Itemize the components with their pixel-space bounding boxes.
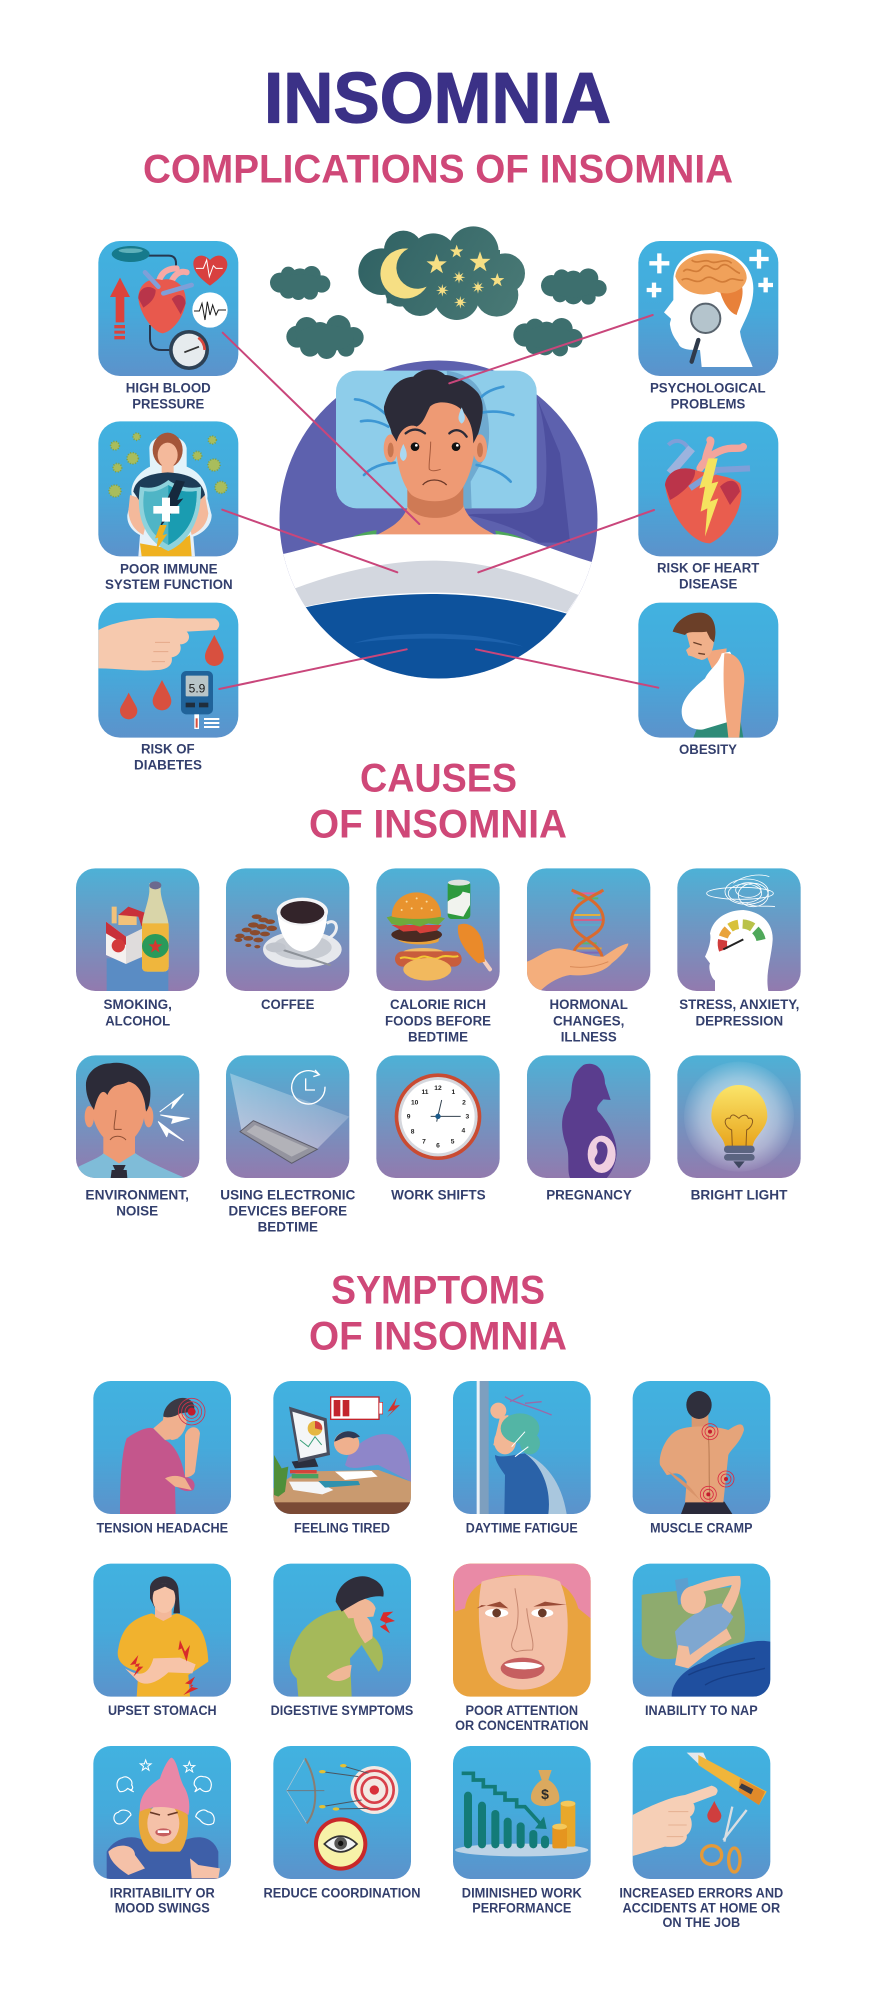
label: STRESS, ANXIETY,	[679, 997, 799, 1012]
label: USING ELECTRONIC	[220, 1188, 356, 1202]
label: DIMINISHED WORK	[462, 1886, 582, 1900]
label: PERFORMANCE	[472, 1900, 571, 1915]
icon: finger, blood drops and glucose meter	[98, 603, 238, 738]
icon: wall clock: 6	[436, 1143, 440, 1150]
label: OR CONCENTRATION	[455, 1718, 588, 1733]
heading: symptoms: SYMPTOMS	[331, 1269, 545, 1313]
label: UPSET STOMACH	[108, 1703, 217, 1718]
label: DEPRESSION	[695, 1013, 783, 1028]
icon: pregnant silhouette with fetus	[527, 1055, 650, 1178]
heading: causes: OF INSOMNIA	[309, 802, 567, 846]
icon: wall clock: 5	[451, 1139, 455, 1146]
panel: risk of diabetes	[98, 603, 238, 772]
panel: stress, anxiety, depression	[677, 868, 801, 1028]
panel: poor immune system function	[98, 421, 238, 592]
heading: symptoms: OF INSOMNIA	[309, 1314, 567, 1358]
label	[657, 561, 760, 591]
label	[385, 997, 491, 1044]
label: ACCIDENTS AT HOME OR	[622, 1900, 780, 1915]
icon: bow, target and eye	[273, 1746, 411, 1879]
icon: exhausted surgeon leaning on pole	[453, 1381, 591, 1514]
icon: finger, blood drops and glucose meter: 5.9	[189, 681, 206, 695]
panel: high blood pressure	[98, 241, 238, 411]
purple circle	[279, 360, 597, 678]
icon: head with stress gauge and scribble	[677, 868, 801, 991]
label: DAYTIME FATIGUE	[466, 1520, 578, 1535]
icon: burger, soda, chicken and hotdog	[376, 868, 500, 991]
label: DISEASE	[679, 576, 737, 591]
icon: small cloud top left	[270, 266, 330, 300]
icon: small cloud lower left	[286, 315, 364, 359]
label	[679, 997, 799, 1028]
panel: work shifts	[376, 1055, 500, 1202]
label: BEDTIME	[258, 1220, 318, 1234]
label: INABILITY TO NAP	[645, 1703, 758, 1718]
icon: man's back with pain points	[633, 1381, 770, 1514]
label: BRIGHT LIGHT	[691, 1188, 788, 1202]
label: ILLNESS	[561, 1029, 617, 1044]
label: PRESSURE	[132, 396, 204, 411]
label: MOOD SWINGS	[115, 1900, 210, 1915]
heading: symptoms	[309, 1269, 567, 1358]
label	[455, 1703, 588, 1733]
panel: daytime fatigue	[453, 1381, 591, 1535]
label: FEELING TIRED	[294, 1520, 390, 1535]
icon: wall clock: 12	[434, 1085, 442, 1092]
icon: small cloud lower right	[513, 318, 583, 356]
label	[220, 1188, 356, 1234]
label: MUSCLE CRAMP	[650, 1520, 752, 1535]
panel: using electronic devices before bedtime	[220, 1055, 356, 1234]
panel: risk of heart disease	[638, 421, 778, 591]
label	[126, 380, 211, 411]
icon: man asleep at desk with low battery	[273, 1381, 411, 1514]
heading: complications: COMPLICATIONS OF INSOMNIA	[143, 148, 733, 192]
icon: frowning woman's face	[453, 1564, 591, 1697]
heading: causes	[309, 756, 567, 846]
icon: large cloud with moon and stars	[358, 226, 525, 320]
panel: smoking, alcohol	[76, 868, 199, 1028]
label: PSYCHOLOGICAL	[650, 380, 766, 395]
icon: wall clock: 1	[451, 1089, 455, 1096]
panel: tension headache	[93, 1381, 231, 1535]
icon: head with brain and magnifier	[638, 241, 778, 376]
label	[619, 1886, 783, 1930]
man's head and shoulders	[343, 370, 532, 547]
label: TENSION HEADACHE	[96, 1520, 228, 1535]
label: PREGNANCY	[546, 1188, 632, 1202]
icon: coffee cup and beans	[226, 868, 349, 991]
panel: hormonal changes, illness	[527, 868, 650, 1044]
panel: psychological problems	[638, 241, 778, 411]
icon: falling bar chart with money: $	[541, 1786, 549, 1802]
icon: wall clock: 2	[462, 1100, 466, 1107]
icon: woman holding stomach	[93, 1564, 231, 1697]
icon: angry woman with steam clouds	[93, 1746, 231, 1879]
icon: annoyed man with noise bolts	[76, 1055, 199, 1178]
icon: small cloud top right	[541, 268, 607, 305]
label: FOODS BEFORE	[385, 1013, 491, 1028]
label: RISK OF HEART	[657, 561, 760, 576]
label: WORK SHIFTS	[391, 1188, 486, 1202]
pillow	[336, 371, 570, 543]
panel: digestive symptoms	[271, 1564, 413, 1718]
label: DIGESTIVE SYMPTOMS	[271, 1703, 413, 1718]
label	[462, 1886, 582, 1915]
icon: woman with shield among viruses	[98, 421, 238, 556]
label	[110, 1886, 215, 1915]
panel: diminished work performance	[453, 1746, 591, 1915]
label: RISK OF	[141, 742, 195, 756]
label	[104, 997, 172, 1028]
panel: environment, noise	[76, 1055, 199, 1218]
label	[134, 742, 202, 772]
label: BEDTIME	[408, 1029, 468, 1044]
central illustration: sleepless man in bed with night clouds	[270, 226, 607, 687]
label: REDUCE COORDINATION	[264, 1886, 420, 1900]
label	[650, 380, 766, 411]
panel: inability to nap	[633, 1564, 770, 1718]
icon: falling bar chart with money	[453, 1746, 591, 1879]
panel: irritability or mood swings	[93, 1746, 231, 1915]
panel: reduce coordination	[264, 1746, 420, 1900]
connector lines from complications to the man	[219, 315, 658, 689]
label	[550, 997, 628, 1044]
label: COFFEE	[261, 997, 314, 1012]
label: POOR IMMUNE	[120, 561, 218, 576]
label: CHANGES,	[553, 1013, 624, 1028]
label: POOR ATTENTION	[465, 1703, 578, 1718]
label: HIGH BLOOD	[126, 380, 211, 395]
icon: phone with light beam and clock	[226, 1055, 349, 1178]
label: PROBLEMS	[671, 396, 745, 411]
panel: calorie rich foods before bedtime	[376, 868, 500, 1044]
label: OBESITY	[679, 742, 737, 757]
icon: wall clock: 3	[465, 1114, 469, 1121]
heading: causes: CAUSES	[360, 756, 517, 800]
panel: upset stomach	[93, 1564, 231, 1718]
panel: coffee	[226, 868, 349, 1012]
icon: heart, gauge and rising arrow	[98, 241, 238, 376]
icon: overweight man looking down	[638, 603, 778, 738]
icon: wall clock: 9	[407, 1114, 411, 1121]
icon: heart with lightning	[638, 421, 778, 556]
icon: wall clock	[376, 1055, 500, 1178]
panel: increased errors and accidents	[619, 1746, 783, 1930]
panel: obesity	[638, 603, 778, 757]
icon: man holding aching head	[93, 1381, 231, 1514]
title: INSOMNIA	[264, 60, 611, 138]
panel: feeling tired	[273, 1381, 411, 1535]
icon: DNA helix over hand	[527, 868, 650, 991]
label: HORMONAL	[550, 997, 628, 1012]
panel: muscle cramp	[633, 1381, 770, 1535]
label: DEVICES BEFORE	[228, 1204, 347, 1218]
icon: wall clock: 4	[461, 1128, 465, 1135]
blanket	[278, 534, 597, 687]
icon: wall clock: 8	[411, 1128, 415, 1135]
icon: cigarette pack and bottle	[76, 868, 199, 991]
label: INCREASED ERRORS AND	[619, 1886, 783, 1900]
icon: wall clock: 7	[422, 1138, 426, 1145]
label: SYSTEM FUNCTION	[105, 577, 233, 592]
icon: cut finger, cutter and scissors	[633, 1746, 770, 1879]
label	[105, 561, 233, 592]
night clouds	[270, 226, 607, 359]
icon: nauseous man covering mouth	[273, 1564, 411, 1697]
panel: pregnancy	[527, 1055, 650, 1202]
icon: man awake in bed	[633, 1564, 770, 1697]
label: ON THE JOB	[662, 1915, 740, 1930]
label	[85, 1188, 189, 1218]
icon: wall clock: 10	[411, 1100, 419, 1107]
label: ENVIRONMENT,	[85, 1188, 189, 1202]
label: CALORIE RICH	[390, 997, 486, 1012]
label: ALCOHOL	[105, 1013, 170, 1028]
label: NOISE	[116, 1204, 158, 1218]
icon: wall clock: 11	[421, 1089, 429, 1096]
label: DIABETES	[134, 758, 202, 772]
icon: glowing light bulb	[677, 1055, 801, 1178]
panel: bright light	[677, 1055, 801, 1202]
label: SMOKING,	[104, 997, 172, 1012]
panel: poor attention or concentration	[453, 1564, 591, 1733]
label: IRRITABILITY OR	[110, 1886, 215, 1900]
